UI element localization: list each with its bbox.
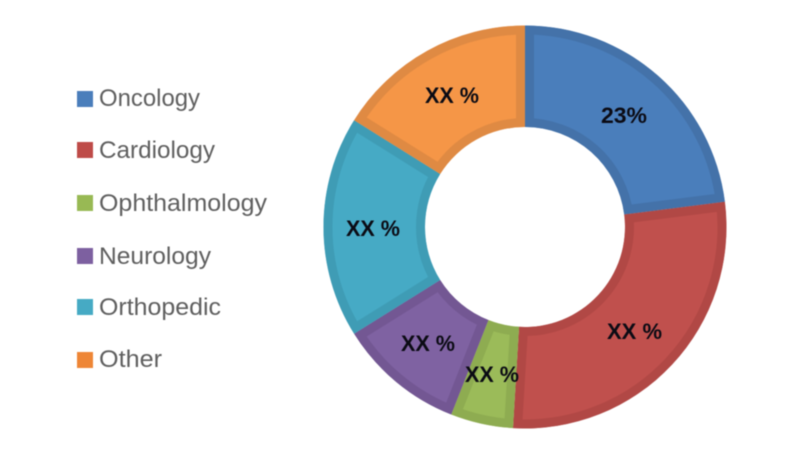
label: Cardiology value: XX % — [607, 319, 662, 344]
label: Other value: XX % — [425, 83, 479, 108]
slice: Orthopedic — [323, 120, 440, 334]
label: Ophthalmology value: XX % — [465, 362, 519, 387]
label: Neurology value: XX % — [401, 331, 455, 356]
legend — [77, 85, 267, 373]
legend item: Ophthalmology: Ophthalmology — [99, 190, 267, 217]
legend item: Cardiology: Cardiology — [99, 137, 215, 164]
legend item: Oncology: Oncology — [99, 85, 200, 112]
donut chart — [323, 26, 726, 428]
slice: Ophthalmology — [451, 320, 519, 428]
slice: Other — [354, 26, 525, 174]
label: Oncology value: 23% — [601, 103, 647, 128]
slice: Cardiology — [513, 202, 726, 428]
donut chart infographic — [76, 24, 728, 430]
legend item: Neurology: Neurology — [99, 243, 211, 270]
data labels — [346, 83, 662, 387]
legend item: Orthopedic: Orthopedic — [99, 294, 221, 321]
slice: Oncology — [525, 26, 725, 214]
label: Orthopedic value: XX % — [346, 216, 400, 241]
legend item: Other: Other — [99, 346, 162, 373]
slice: Neurology — [354, 280, 488, 414]
